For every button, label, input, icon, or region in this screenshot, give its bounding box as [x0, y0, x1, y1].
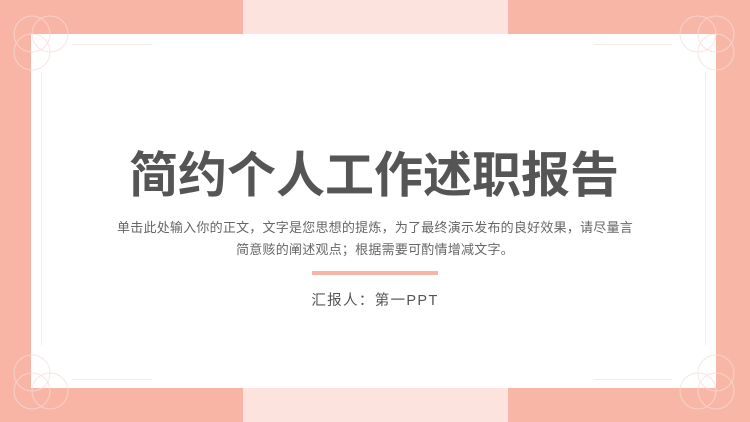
accent divider bar	[312, 271, 438, 275]
icon: bottom-left circles	[14, 355, 68, 409]
body text: 简意赅的阐述观点；根据需要可酌情增减文字。	[236, 242, 514, 257]
icon: top-right circles	[680, 16, 734, 70]
background: left salmon band	[0, 0, 243, 422]
white content card	[31, 34, 716, 388]
presenter line: 汇报人：第一PPT	[311, 293, 439, 309]
body text	[117, 220, 633, 257]
icon: top-left circles	[14, 16, 68, 70]
background: center pale pink band	[243, 0, 508, 422]
body text: 单击此处输入你的正文，文字是您思想的提炼，为了最终演示发布的良好效果，请尽量言	[117, 220, 633, 235]
background: right salmon band	[508, 0, 750, 422]
title: 简约个人工作述职报告	[129, 149, 619, 203]
icon: bottom-right circles	[680, 355, 734, 409]
